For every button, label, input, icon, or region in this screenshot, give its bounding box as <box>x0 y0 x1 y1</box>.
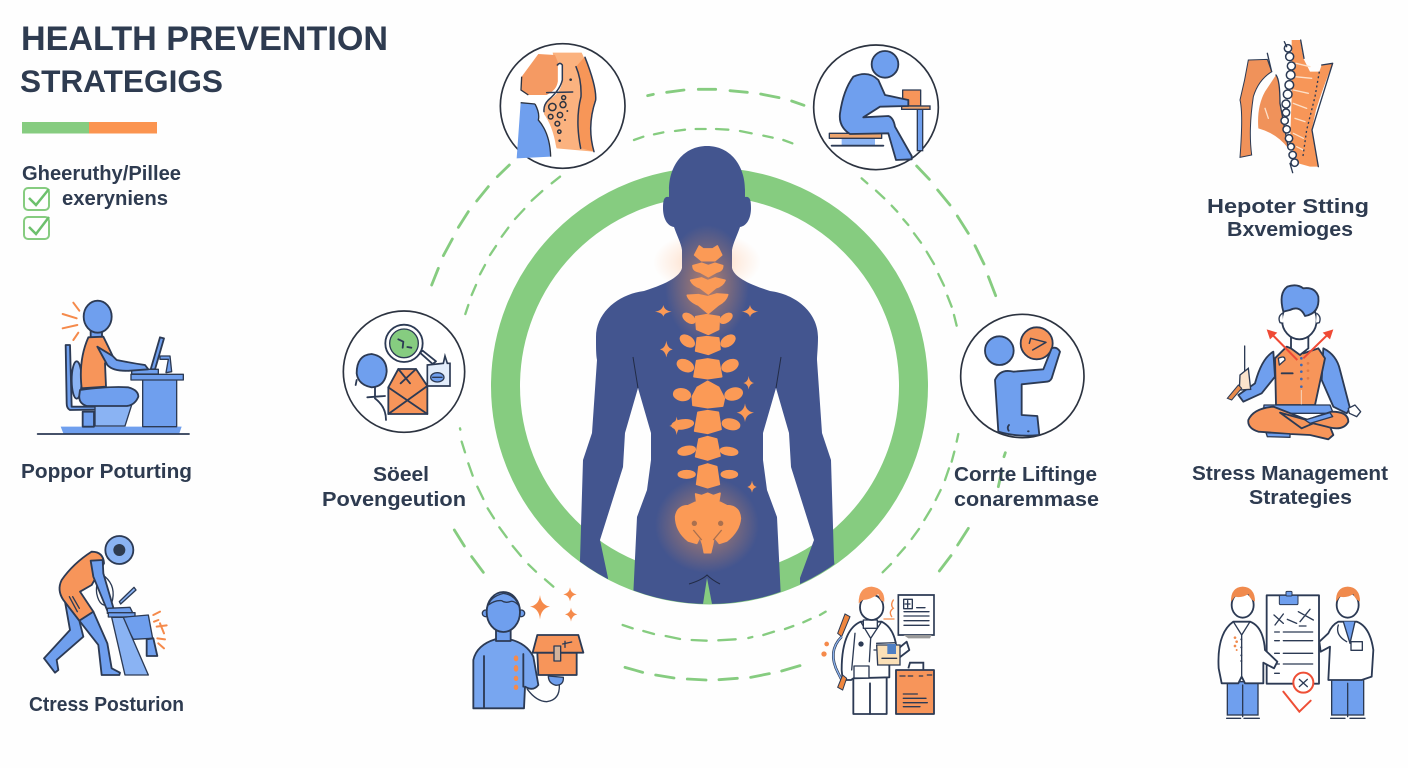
icon: two doctors with clipboard <box>1218 587 1373 718</box>
label: stress management <box>1192 463 1388 509</box>
left doctor <box>1218 587 1277 718</box>
label: top right: Bxvemioges <box>1227 219 1353 241</box>
icon: spine side view <box>1240 40 1333 173</box>
checklist: Gheeruthy/Pillee <box>22 163 181 185</box>
icon: patient holding box <box>473 587 583 708</box>
label: sitting posture: Poppor Poturting <box>21 461 192 483</box>
label: top right: Hepoter Stting <box>1207 196 1369 218</box>
title: STRATEGIGS <box>20 63 223 99</box>
green ring <box>506 182 914 590</box>
title <box>20 20 388 99</box>
icon: meditating stress management figure <box>1227 285 1361 439</box>
icon: inspection circle <box>343 311 465 432</box>
label: right center: conaremmase <box>954 489 1099 511</box>
icon: spine anatomy circle <box>500 44 625 168</box>
label: left center: Söeel <box>373 464 429 486</box>
label: left center <box>322 464 466 511</box>
label: left center: Povengeution <box>322 489 466 511</box>
title accent bar <box>22 122 157 134</box>
icon: bent-over lifting posture <box>44 536 167 675</box>
sparkles <box>655 305 758 493</box>
vertebrae <box>671 246 744 553</box>
sacrum and pelvis <box>676 493 740 553</box>
neck glow <box>653 232 761 292</box>
label: right center <box>954 464 1099 511</box>
central figure with glowing spine <box>575 146 840 620</box>
label: stress management: Strategies <box>1249 487 1352 509</box>
right doctor <box>1319 587 1373 718</box>
spine glow <box>655 225 759 573</box>
title: HEALTH PREVENTION <box>21 20 388 58</box>
icon: poor posture at desk <box>38 301 189 434</box>
icon: lifting ball circle <box>961 314 1084 438</box>
checklist: exeryniens <box>62 188 168 210</box>
label: stress management: Stress Management <box>1192 463 1388 485</box>
label: top right <box>1207 196 1369 241</box>
label: lifting posture: Ctress Posturion <box>29 694 184 716</box>
icon: seated at desk circle <box>814 45 938 170</box>
dashed orbit arcs <box>432 89 1005 680</box>
checklist <box>22 163 181 239</box>
icon: doctor with chart and case <box>821 587 934 714</box>
label: right center: Corrte Liftinge <box>954 464 1097 486</box>
body silhouette <box>575 146 840 620</box>
